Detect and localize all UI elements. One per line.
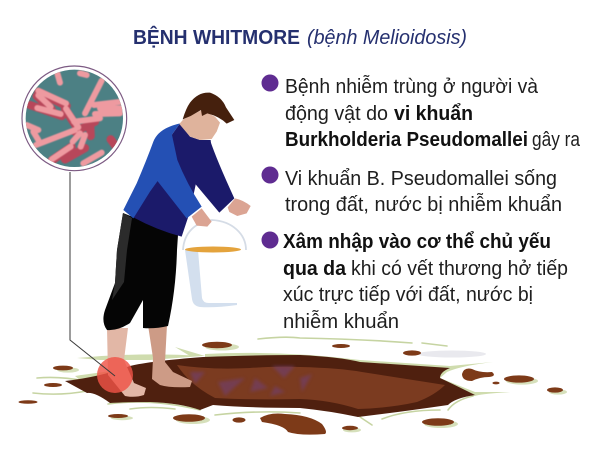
splash shadows [57,344,567,432]
bullet 3: Xâm nhập vào cơ thể chủ yếu [283,231,551,253]
hair [183,93,234,124]
bullet 3 [262,231,568,333]
man pouring from bucket [103,93,251,397]
puddle lighter mud [177,365,445,409]
head and neck [179,110,220,140]
bucket handle [183,220,246,250]
mud puddle [18,337,567,435]
torso and arms [123,93,251,237]
bacteria image [23,68,127,168]
purple watermark marks [190,366,312,396]
far hand [228,198,251,216]
bullet 1: động vật do [285,103,388,125]
mud splashes [18,342,563,435]
bullet 1: Burkholderia Pseudomallei [285,129,528,151]
trousers [103,213,178,330]
dark torso [133,123,212,237]
red infection spot on foot [97,357,133,393]
bullet 3: nhiễm khuẩn [283,310,399,333]
bullet 3: khi có vết thương hở tiếp [351,258,568,280]
bacteria magnifier [22,66,127,171]
bullet 2 [262,166,562,216]
blue sleeve [153,133,202,218]
near hand [192,208,212,227]
dark arm [193,140,234,213]
bullet 1 [262,74,581,151]
bucket [183,220,246,307]
green wedges around puddle [75,347,510,396]
bucket contents [185,246,241,252]
trouser highlight [112,213,132,300]
bullet 1: Bệnh nhiễm trùng ở người và [285,75,539,98]
back leg [107,328,146,397]
bullet list [262,74,581,333]
front leg [148,325,192,387]
title [133,25,467,49]
teal background [23,68,127,168]
light rods [27,73,122,163]
blue body side [123,123,180,218]
magnifier ring [22,66,127,171]
bucket body [185,250,237,307]
bullet 2: Vi khuẩn B. Pseudomallei sống [285,168,557,190]
title: BỆNH WHITMORE [133,25,300,49]
dark rods [30,92,115,161]
puddle green rim lines [33,337,473,425]
bullet 3: qua da [283,258,347,280]
bullet 2: trong đất, nước bị nhiễm khuẩn [285,193,562,216]
bullet 1: vi khuẩn [394,103,473,125]
grey smudge [418,350,486,358]
puddle dark mud [65,355,475,417]
bullet 3: xúc trực tiếp với đất, nước bị [283,284,533,306]
title: (bệnh Melioidosis) [307,27,467,49]
bullet 1: gây ra [532,129,581,151]
callout line [70,172,115,376]
